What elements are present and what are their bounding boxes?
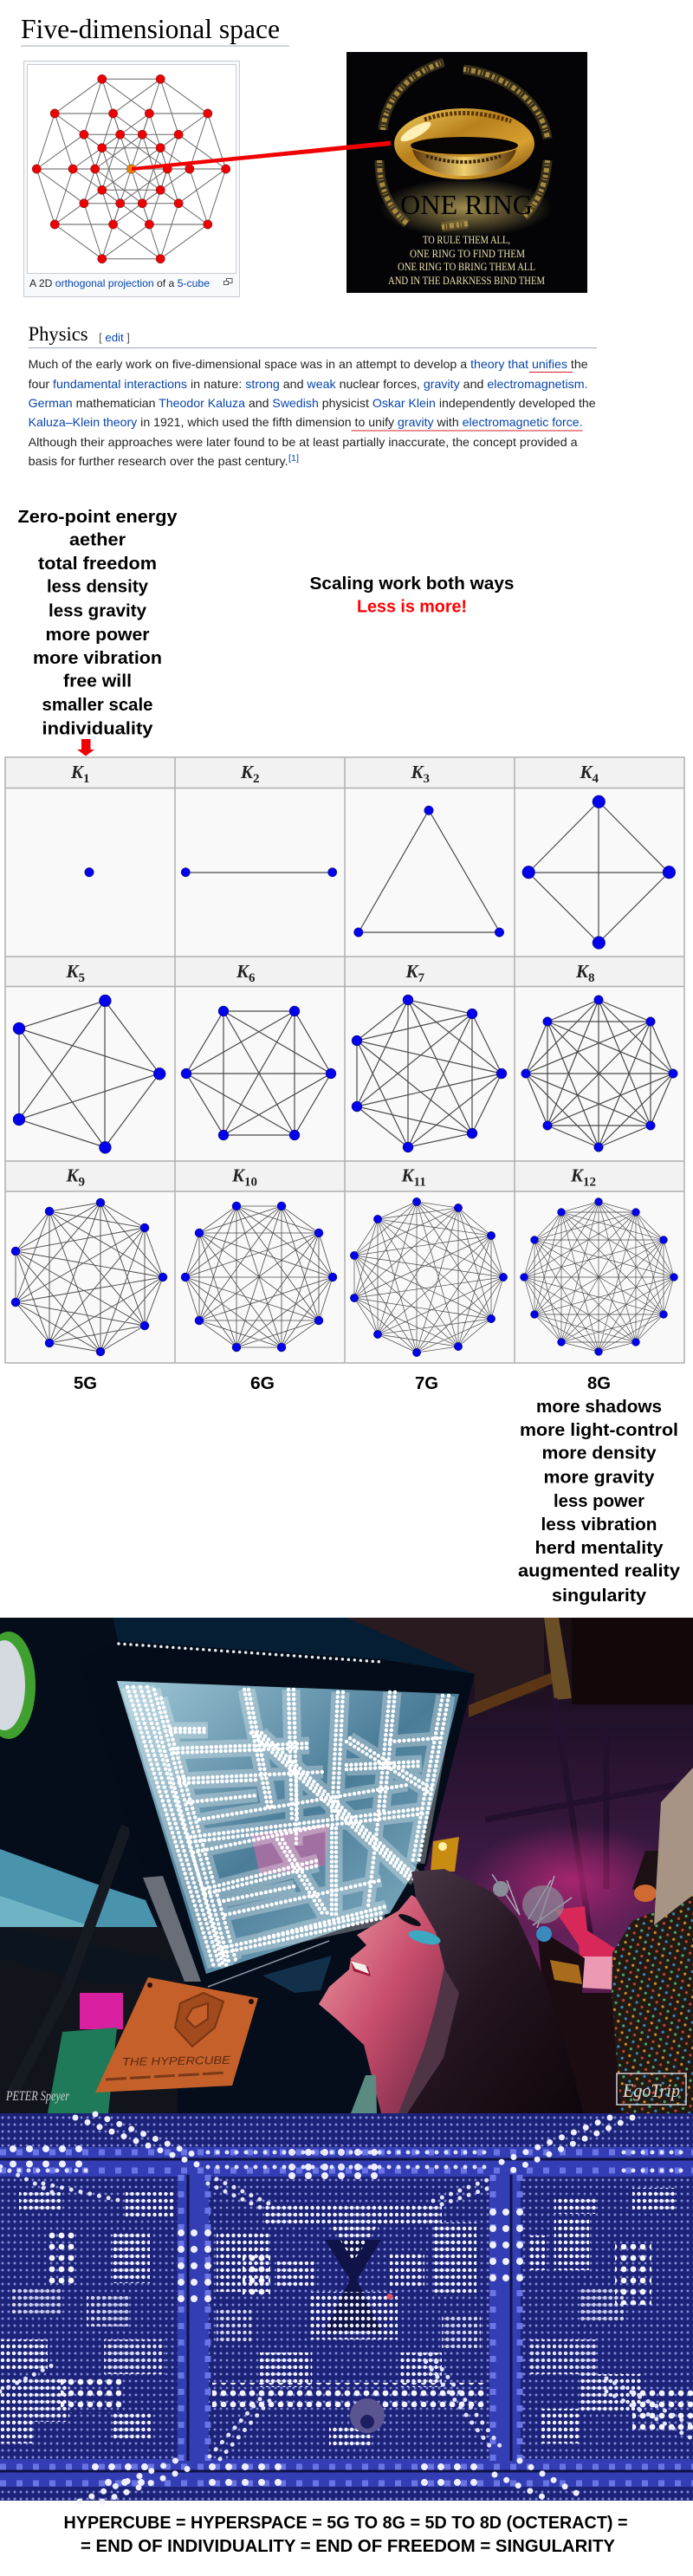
background wall <box>346 1618 693 2113</box>
photo: LED hypercube interior <box>0 2113 693 2501</box>
list: 8G properties: less vibration <box>541 1515 657 1535</box>
labels: 5G, 6G, 7G: 6G <box>250 1374 275 1393</box>
glow behind lettering <box>379 178 553 237</box>
list: 8G properties: more gravity <box>544 1468 655 1487</box>
inscription ring <box>379 62 547 227</box>
text block: Physics paragraph: basis for further research over the past century. <box>29 454 288 468</box>
photo: woman looking at hypercube <box>0 1618 693 2113</box>
graph: K12 <box>520 1197 677 1355</box>
header: K12: 12 <box>583 1175 596 1189</box>
header: K3: K <box>411 762 424 782</box>
header: K10: K <box>231 1165 246 1185</box>
text block: scaling note: Less is more! <box>357 598 467 617</box>
text block: Physics paragraph: Although their approaches were later found to be at least partially inaccurate, the concept provided a <box>29 435 578 449</box>
header: K1: K <box>70 762 85 782</box>
caption: hypercube conclusion <box>64 2514 627 2556</box>
ceiling and beam <box>346 1618 693 1984</box>
header: K9: K <box>66 1165 80 1185</box>
dot blocks <box>0 2188 693 2448</box>
top band <box>113 1618 475 1674</box>
poster: One Ring: ONE RING TO BRING THEM ALL <box>398 260 535 273</box>
list: zero-point energy properties <box>17 508 178 738</box>
red dot <box>386 2294 393 2300</box>
header: K5: K <box>66 961 80 982</box>
header: K6: 6 <box>249 971 256 985</box>
header: K4: K <box>579 762 594 782</box>
graph: K1 <box>85 867 94 877</box>
list: 8G properties: singularity <box>552 1586 647 1606</box>
hypercube frame <box>78 1641 475 1986</box>
list: zero-point energy properties: Zero-point energy <box>17 508 178 527</box>
header: K1: 1 <box>83 772 90 786</box>
wooden sign: THE HYPERCUBE <box>122 2054 230 2068</box>
necklace <box>351 2075 377 2113</box>
graph: K10 <box>181 1202 337 1352</box>
list: zero-point energy properties: aether <box>69 530 126 549</box>
title: Five-dimensional space: Five-dimensional space <box>21 13 280 44</box>
header: K5: 5 <box>79 971 85 985</box>
text block: Physics paragraph: [1] <box>288 454 299 464</box>
graph: K9 <box>11 1198 167 1356</box>
tiara <box>492 1874 572 1942</box>
icon: enlarge <box>223 279 232 284</box>
labels: 5G, 6G, 7G: 5G <box>74 1374 97 1393</box>
text block: scaling note: Scaling work both ways <box>310 574 515 594</box>
header: K6: K <box>236 961 250 982</box>
top LED strip <box>119 1644 381 1662</box>
graph: K7 <box>352 995 507 1152</box>
watermark: Ego Trip: EgoTrip <box>622 2080 680 2101</box>
hypercube LED panel <box>117 1681 459 1974</box>
header: K8: K <box>575 961 590 982</box>
header: K11: 11 <box>414 1175 426 1189</box>
list: 8G properties <box>518 1374 681 1606</box>
silver stand <box>143 1876 201 1982</box>
arrow: red down arrow to K1 <box>77 739 94 756</box>
icon: gold ring <box>394 108 534 179</box>
graph: K8 <box>521 996 677 1152</box>
lens flare blob <box>350 2398 385 2433</box>
right woman: jacket <box>612 1768 693 2113</box>
header: K7: K <box>405 961 419 982</box>
labels: 5G, 6G, 7G <box>74 1374 438 1393</box>
text block: Physics paragraph <box>29 357 596 468</box>
balloon <box>0 1632 36 1739</box>
header: K3: 3 <box>424 772 430 786</box>
big LED rows <box>0 2114 693 2501</box>
black bar <box>10 1827 126 2097</box>
heading: Physics: [ edit ] <box>99 331 130 344</box>
heading: Physics <box>29 323 597 348</box>
list: zero-point energy properties: smaller scale <box>42 696 152 715</box>
header: K8: 8 <box>588 971 595 985</box>
arrow: red line from cube centre to ring <box>132 140 391 171</box>
poster: One Ring: TO RULE THEM ALL, <box>423 233 510 246</box>
text block: Physics paragraph: four fundamental interactions in nature: strong and weak nuclear forces, gravity and electromagnetism. <box>29 377 588 391</box>
list: 8G properties: more light-control <box>520 1421 678 1440</box>
wooden sign <box>95 1977 258 2093</box>
panel: 5-cube thumbnail <box>24 61 239 296</box>
text block: Physics paragraph: German mathematician Theodor Kaluza and Swedish physicist Oskar Klein independently developed the <box>29 396 596 410</box>
yellow light <box>431 1837 459 1872</box>
list: zero-point energy properties: individuality <box>42 719 153 738</box>
list: zero-point energy properties: less density <box>47 577 149 596</box>
chart: 5-cube graph projection <box>32 75 230 263</box>
labels: 5G, 6G, 7G: 7G <box>415 1374 438 1393</box>
list: 8G properties: augmented reality <box>518 1561 681 1580</box>
table: complete graphs K1 to K12 <box>5 757 684 1363</box>
header: K12: K <box>570 1165 585 1185</box>
graph: K3 <box>353 806 504 937</box>
caption: hypercube conclusion: HYPERCUBE = HYPERSPACE = 5G TO 8G = 5D TO 8D (OCTERACT) = <box>64 2514 627 2533</box>
list: 8G properties: herd mentality <box>535 1539 664 1558</box>
list: zero-point energy properties: more vibration <box>33 649 162 668</box>
list: 8G properties: less power <box>554 1492 644 1511</box>
caption: A 2D orthogonal projection of a 5-cube <box>29 277 210 289</box>
background person and tent <box>537 1851 665 2113</box>
woman: face <box>319 1895 444 2113</box>
header: K2: 2 <box>253 772 260 786</box>
dark central bowtie <box>325 2240 381 2331</box>
text block: scaling note <box>310 574 515 617</box>
list: zero-point energy properties: less gravity <box>49 601 147 620</box>
graph: K5 <box>13 995 165 1153</box>
poster: One Ring: AND IN THE DARKNESS BIND THEM <box>388 274 545 287</box>
watermark: Ego Trip <box>617 2073 686 2105</box>
list: 8G properties: more density <box>542 1444 657 1463</box>
graph: K11 <box>350 1197 508 1357</box>
graph: K4 <box>522 795 676 949</box>
header: K7: 7 <box>418 971 425 985</box>
header: K2: K <box>240 762 255 782</box>
caption: hypercube conclusion: = END OF INDIVIDUALITY = END OF FREEDOM = SINGULARITY <box>81 2537 616 2556</box>
list: zero-point energy properties: total freedom <box>38 555 157 574</box>
heading: Physics: Physics <box>29 323 88 345</box>
watermark: Peter Speyer: PETER Speyer <box>5 2089 70 2104</box>
left wall beam <box>0 1849 172 1961</box>
graph: K2 <box>181 868 337 877</box>
graph: K6 <box>181 1006 336 1140</box>
text block: Physics paragraph: Much of the early work on five-dimensional space was in an attempt to develop a theory that unifies the <box>29 357 588 371</box>
poster: One Ring: ONE RING TO FIND THEM <box>410 247 525 260</box>
header: K10: 10 <box>244 1175 257 1189</box>
text block: Physics paragraph: Kaluza–Klein theory in 1921, which used the fifth dimension to unify gravity with electromagnetic force. <box>29 415 583 429</box>
poster: One Ring <box>346 52 587 293</box>
glowing frame bars <box>0 2147 693 2487</box>
header: K4: 4 <box>593 772 599 786</box>
magenta and green reflections <box>48 1993 123 2113</box>
list: 8G properties: 8G <box>587 1374 611 1393</box>
lettering: ONE RING <box>400 189 533 220</box>
header: K11: K <box>400 1165 416 1185</box>
woman: hair <box>392 1869 583 2113</box>
list: zero-point energy properties: free will <box>63 672 132 691</box>
list: 8G properties: more shadows <box>536 1398 662 1417</box>
list: zero-point energy properties: more power <box>45 626 150 645</box>
blue plate under cube <box>262 1956 332 1993</box>
header: K9: 9 <box>79 1175 85 1189</box>
